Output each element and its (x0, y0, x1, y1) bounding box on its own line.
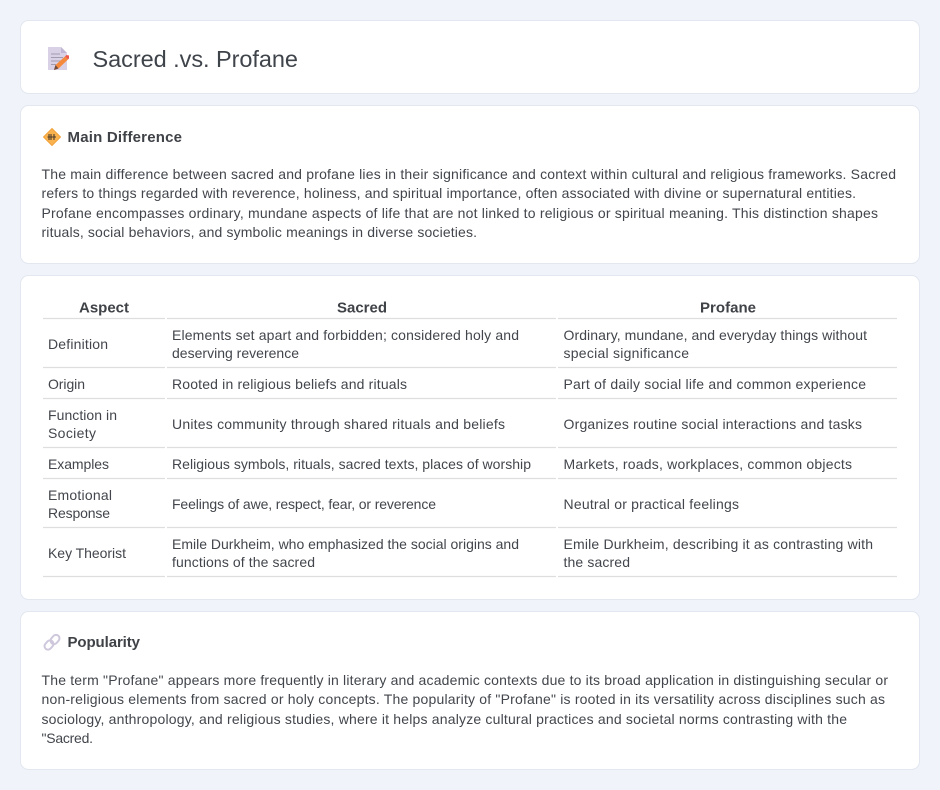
table row: definition: deserving reverence (172, 345, 299, 361)
table row: origin: Origin (48, 376, 85, 392)
table row: examples (43, 456, 897, 478)
table row: key theorist: the sacred (564, 554, 630, 570)
table header row (43, 300, 897, 318)
text block: popularity paragraph (42, 672, 888, 746)
table row: function in society: Society (48, 425, 96, 441)
table row: key theorist (43, 536, 897, 576)
text block: popularity paragraph: non-religious elements from sacred or holy concepts. The popularity of "Profane" is rooted in its versatility across disciplines such as (42, 691, 885, 707)
table row: definition: Ordinary, mundane, and everyday things without (564, 327, 867, 343)
table row: definition: special significance (564, 345, 689, 361)
table row: emotional response: Response (48, 505, 110, 521)
icon: document with pencil (48, 47, 69, 70)
text block: main difference paragraph: refers to things regarded with reverence, holiness, and spiritual importance, often associated with divine or supernatural entities. (42, 185, 856, 201)
table row: emotional response: Neutral or practical feelings (564, 496, 739, 512)
table row: definition: Elements set apart and forbidden; considered holy and (172, 327, 519, 343)
text block: main difference paragraph: rituals, social behaviors, and symbolic meanings in diverse societies. (42, 224, 477, 240)
table row: examples: Examples (48, 456, 109, 472)
table row: origin: Part of daily social life and common experience (564, 376, 866, 392)
table row: key theorist: Key Theorist (48, 545, 126, 561)
panel: popularity (20, 612, 920, 770)
text block: popularity paragraph: sociology, anthropology, and religious studies, where it helps analyze cultural practices and societal norms contrasting with the (42, 711, 847, 727)
panel: comparison table (20, 276, 920, 600)
table row: key theorist: Emile Durkheim, who emphasized the social origins and (172, 536, 519, 552)
table row: emotional response (43, 487, 897, 528)
table row: examples: Markets, roads, workplaces, common objects (564, 456, 852, 472)
table row: examples: Religious symbols, rituals, sacred texts, places of worship (172, 456, 531, 472)
table row: function in society: Organizes routine social interactions and tasks (564, 416, 862, 432)
title: Sacred .vs. Profane (92, 46, 298, 72)
table header row: Aspect (79, 300, 129, 316)
table row: function in society (43, 407, 897, 448)
table row: definition (43, 327, 897, 368)
table row: emotional response: Emotional (48, 487, 112, 503)
icon: chain link (43, 633, 61, 651)
heading: main difference: Main Difference (68, 129, 182, 146)
table header row: Profane (700, 300, 756, 316)
table row: function in society: Function in (48, 407, 117, 423)
text block: main difference paragraph (42, 166, 896, 240)
table row: key theorist: Emile Durkheim, describing it as contrasting with (564, 536, 873, 552)
table header row: Sacred (337, 300, 387, 316)
panel: main difference (20, 106, 920, 264)
table row: emotional response: Feelings of awe, respect, fear, or reverence (172, 496, 436, 512)
text block: popularity paragraph: "Sacred. (42, 730, 93, 746)
text block: main difference paragraph: The main difference between sacred and profane lies in their significance and context within cultural and religious frameworks. Sacred (42, 166, 896, 182)
table row: function in society: Unites community through shared rituals and beliefs (172, 416, 505, 432)
heading: popularity: Popularity (68, 634, 141, 651)
table row: origin (43, 376, 897, 398)
table row: origin: Rooted in religious beliefs and rituals (172, 376, 407, 392)
panel: title header (20, 20, 920, 94)
text block: popularity paragraph: The term "Profane" appears more frequently in literary and academic contexts due to its broad application in distinguishing secular or (42, 672, 888, 688)
table row: definition: Definition (48, 336, 108, 352)
icon: warning diamond (44, 128, 60, 146)
text block: main difference paragraph: Profane encompasses ordinary, mundane aspects of life that are not linked to religious or spiritual meaning. This distinction shapes (42, 205, 878, 221)
table row: key theorist: functions of the sacred (172, 554, 315, 570)
